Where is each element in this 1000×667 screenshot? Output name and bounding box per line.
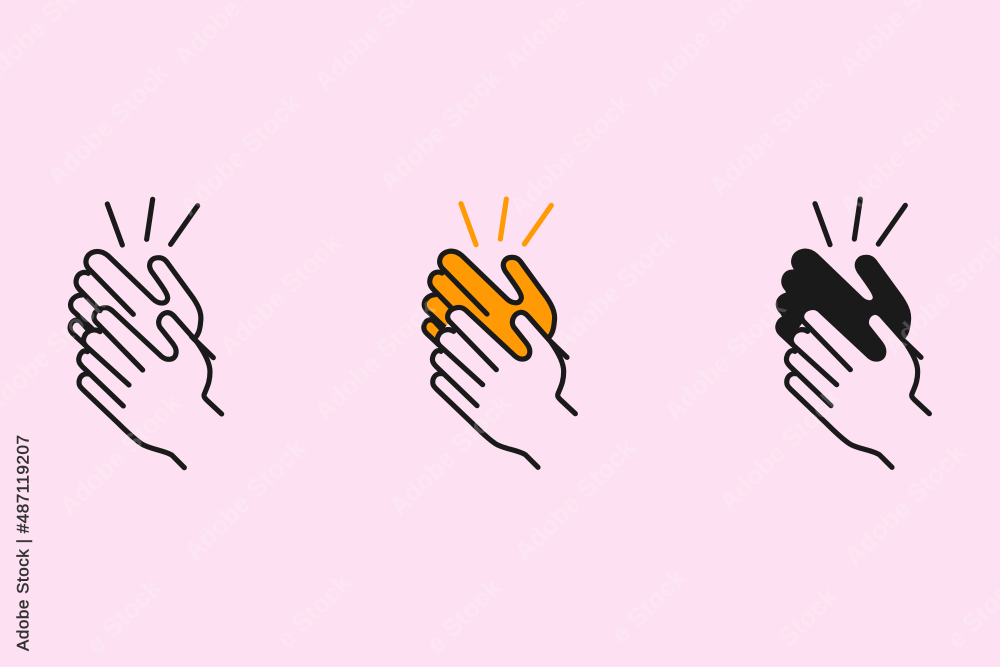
watermark pattern: Adobe Stock (173, 87, 307, 221)
watermark pattern: Adobe Stock (833, 87, 967, 221)
watermark pattern: e Stock (605, 562, 692, 649)
back hand outline (424, 251, 567, 357)
watermark pattern: e Stock (420, 572, 507, 659)
front hand outline (432, 307, 575, 467)
icon: clapping hands, black glyph style (778, 199, 929, 467)
watermark pattern: Adobe Stock (713, 382, 847, 516)
watermark pattern: Adobe Stock (838, 437, 972, 571)
watermark pattern: Adobe Stock (503, 87, 637, 221)
watermark pattern: Stock (772, 581, 844, 652)
icon: clapping hands, orange filled style (424, 199, 575, 467)
watermark pattern: Adobe Stock (548, 222, 682, 356)
vertical stock id text: Adobe Stock | #487119207 (14, 435, 32, 651)
watermark pattern: Adobe Stock (41, 57, 175, 191)
icon: clap rays, black (107, 199, 198, 245)
watermark pattern: e Stock (80, 572, 167, 659)
watermark pattern: Adobe Stock (703, 67, 837, 201)
front hand outline (79, 308, 222, 468)
front hand pink fill (786, 307, 929, 467)
watermark pattern: Adobe Stock (508, 432, 642, 566)
back hand orange fill (424, 251, 555, 366)
back hand black fill (778, 251, 909, 366)
watermark pattern: Adobe Stock (383, 387, 517, 521)
icon: clap rays, black (815, 199, 905, 245)
watermark pattern: e Stock (270, 567, 357, 654)
icon: clap rays, orange (461, 199, 551, 245)
watermark pattern: Adobe Stock (178, 432, 312, 566)
watermark pattern: Adobe Stock (213, 227, 347, 361)
front hand pink fill (432, 307, 575, 467)
watermark pattern: Adobe Stock (308, 292, 442, 426)
back hand outline (70, 251, 213, 358)
watermark pattern: Adobe Stock (658, 292, 792, 426)
back hand wrist line (899, 336, 921, 357)
icon: clapping hands, outline style (70, 199, 222, 468)
front hand outline (786, 307, 929, 467)
watermark pattern: Adobe Stock (53, 387, 187, 521)
watermark pattern: Adobe Stock (373, 62, 507, 196)
